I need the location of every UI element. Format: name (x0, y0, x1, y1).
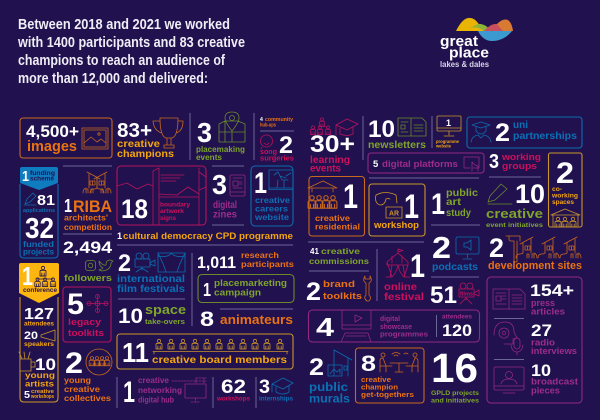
panel: boundary artwork signs: 18 (121, 194, 148, 224)
panel: creative residential: 1 (343, 178, 358, 216)
panel: boundary artwork signs: signs (160, 215, 176, 222)
stat: creative champions (117, 118, 183, 160)
stat: research participants (197, 251, 295, 272)
stat: programme website: 1 (446, 118, 451, 128)
stat: internships (259, 377, 294, 402)
stat: public art study: art (446, 196, 462, 208)
stat: animateurs: 8 (200, 308, 214, 331)
icon: map pin (219, 112, 245, 142)
panel: creative careers website: website (254, 212, 289, 222)
panel: press, radio, broadcast: 10 (531, 361, 551, 380)
panel: placemarketing campaign: placemarketing (214, 278, 287, 288)
stat: brand toolkits: brand (323, 279, 355, 290)
stat: public art study: 1 (431, 188, 445, 221)
icon: wrench (364, 276, 371, 301)
stat: followers (63, 238, 113, 284)
panel: legacy toolkits: legacy (68, 317, 101, 327)
icon: houses (83, 172, 111, 193)
icon: brushes in cup (19, 352, 35, 371)
stat: creative commissions (309, 246, 369, 266)
stat: public art study: study (446, 207, 471, 219)
stat: GPLD projects and initiatives: and initiatives (431, 398, 479, 404)
panel: press, radio, broadcast: articles (531, 306, 565, 316)
stat: song surgeries: surgeries (260, 156, 294, 162)
stat: workshops: 62 (221, 377, 246, 398)
stat: development sites: development sites (488, 260, 582, 272)
stat: public murals: 2 (309, 354, 324, 381)
stat: creative event initiatives: creative (486, 206, 543, 221)
panel: conference: attendees (24, 322, 55, 328)
icon: film camera (459, 283, 479, 304)
icon: people at table with wifi (380, 352, 418, 372)
icon: house mural (328, 350, 352, 376)
panel: press, radio, broadcast: 27 (531, 321, 552, 340)
panel: conference: 10 (35, 355, 56, 374)
panel: creative board members (117, 334, 293, 369)
logo: great place lakes and dales: great (440, 34, 478, 50)
stat: animateurs: animateurs (220, 312, 293, 327)
panel: conference: creative (31, 389, 54, 395)
panel: conference: young (25, 370, 55, 380)
stat: community hub-ups: 4 (260, 117, 263, 123)
panel: creative careers website: careers (255, 204, 288, 214)
panel: creative board members: creative board members (152, 355, 287, 366)
stat: public murals (309, 350, 352, 406)
stat: podcasts: podcasts (432, 262, 478, 273)
stat: programme website: programme (436, 139, 459, 144)
icon: people under roof (308, 181, 337, 208)
banner: 1 funding scheme: scheme (30, 176, 55, 182)
icon: instagram and twitter (86, 260, 113, 271)
panel: creative champion get-togethers: creative (361, 377, 391, 384)
panel: creative residential: creative (315, 213, 350, 223)
panel: creative residential: residential (315, 222, 360, 232)
icon: open newspaper (493, 289, 525, 309)
icon: graduation cap (272, 378, 293, 394)
panel: press, radio, broadcast: broadcast (531, 376, 578, 386)
icon: monitor with presenter (494, 367, 524, 393)
panel: legacy toolkits (63, 287, 111, 342)
stat: working groups (489, 151, 541, 177)
stat: placemaking events (196, 112, 245, 162)
panel: creative champion get-togethers: get-togethers (361, 392, 414, 399)
panel: placemarketing campaign (198, 274, 294, 302)
icon: people in room (551, 209, 580, 227)
stat: RIBA architects' competition: architects' (64, 214, 108, 222)
panel: placemarketing campaign: campaign (214, 288, 261, 298)
stat: brand toolkits: 2 (306, 278, 321, 306)
stat: international film festivals: international (117, 274, 185, 285)
stat: internships: internships (259, 396, 294, 402)
stat: space take-overs: space (145, 302, 186, 317)
icon: tablet zine (230, 175, 245, 196)
stat: young creative collectives (64, 347, 112, 403)
stat: digital zines: zines (213, 208, 237, 220)
stat: animateurs (200, 308, 293, 331)
panel: conference: speakers (24, 341, 54, 348)
logo: great place lakes and dales (440, 18, 513, 69)
panel: digital platforms (368, 153, 484, 173)
stat: space take-overs: 10 (118, 305, 143, 328)
stat: followers: followers (64, 273, 112, 284)
stat: newsletters (368, 116, 427, 151)
stat: international film festivals: film festivals (117, 284, 185, 295)
panel: funding scheme: projects (23, 248, 55, 256)
stat: community hub-ups (260, 117, 293, 128)
stat: workshops: workshops (216, 396, 250, 402)
panel: creative careers website: creative (255, 195, 290, 205)
icon: board table (153, 339, 288, 354)
stat: workshops (216, 377, 250, 402)
title (17, 17, 245, 87)
panel: press, radio, broadcast: press (531, 298, 555, 308)
panel: conference: artists (25, 378, 54, 388)
stat: digital zines: digital (213, 199, 237, 211)
stat: creative champions: creative (117, 138, 160, 150)
icon: circle of people (86, 349, 112, 375)
stat: creative commissions: commissions (309, 256, 369, 266)
icon: monitor speaker (456, 237, 479, 259)
panel: uni partnerships: uni (513, 120, 528, 131)
panel: creative champion get-togethers: 8 (361, 351, 376, 376)
stat: creative event initiatives: 10 (515, 179, 545, 209)
panel: digital showcase programmes: 4 (316, 312, 335, 342)
stat: digital zines (212, 169, 245, 220)
stat: public art study (431, 187, 478, 221)
stat: space take-overs (118, 302, 186, 328)
panel: funding scheme: applications (23, 208, 55, 214)
icon: film camera (135, 253, 155, 272)
stat: public murals: public (309, 380, 348, 394)
panel: conference (19, 261, 59, 402)
panel: digital showcase programmes (308, 310, 480, 342)
title: champions to reach an audience of (18, 53, 225, 69)
stat: international film festivals: 2 (118, 250, 131, 277)
icon: open newsletter (398, 118, 426, 136)
title: more than 12,000 and delivered: (18, 71, 208, 87)
stat: GPLD projects and initiatives: GPLD projects (431, 390, 479, 397)
panel: creative champion get-togethers: champion (361, 384, 398, 392)
panel: legacy toolkits: toolkits (68, 328, 104, 338)
panel: conference: 5 (24, 390, 30, 401)
panel: digital showcase programmes: programmes (380, 330, 428, 338)
stat: working groups: 3 (489, 151, 499, 173)
stat: research participants: 1,011 (197, 253, 236, 272)
stat: learning events: learning (310, 155, 350, 166)
panel: co-working spaces: working (551, 194, 578, 200)
stat: creative champions: 83+ (117, 120, 152, 142)
panel: boundary artwork signs: artwork (160, 208, 184, 215)
icon: AR goggles (376, 192, 402, 218)
stat: online festival: online (384, 282, 417, 293)
panel: conference: workshops (30, 394, 54, 400)
panel: uni partnerships (467, 117, 582, 148)
panel: creative careers website (251, 166, 293, 226)
stat: programme website: website (435, 144, 451, 148)
icon: trophy (153, 118, 183, 148)
stat: learning events: events (310, 164, 341, 174)
stat: GPLD projects and initiatives: 16 (431, 345, 478, 391)
stat: internships: 3 (259, 377, 270, 398)
panel: press, radio, broadcast (487, 277, 582, 403)
panel: creative champion get-togethers (356, 348, 424, 403)
heading: cultural democracy CPD programme: 1 (117, 231, 122, 241)
stat: working groups: working (501, 152, 541, 163)
panel: AR workshop (369, 184, 425, 236)
panel: AR workshop: workshop (373, 220, 419, 231)
icon: crossed tools (87, 294, 108, 312)
stat: creative commissions: creative (321, 246, 360, 256)
stat: programme website (435, 116, 461, 148)
panel: creative residential (308, 176, 364, 236)
banner: 1 funding scheme: funding (30, 171, 55, 177)
stat: community hub-ups: community (265, 117, 293, 123)
logo: great place lakes and dales: place (449, 46, 489, 62)
stat: newsletters: newsletters (368, 140, 427, 151)
stat: young creative collectives: collectives (64, 393, 111, 403)
icon: person at desk (269, 170, 293, 190)
panel: digital showcase programmes: showcase (380, 322, 412, 331)
panel: uni partnerships: partnerships (513, 131, 577, 142)
stat: followers: 2,494 (63, 238, 113, 257)
panel: digital platforms: digital platforms (382, 159, 458, 170)
stat: public art study: public (446, 187, 478, 199)
panel: uni partnerships: 2 (495, 119, 510, 147)
icon: circus tent (386, 249, 410, 277)
banner: 1 conference: conference (23, 288, 58, 294)
panel: digital showcase programmes: digital (380, 314, 400, 323)
stat: RIBA architects' competition: 1 (64, 196, 72, 216)
panel: boundary artwork signs: boundary (160, 202, 190, 208)
panel: funding scheme: 32 (25, 213, 54, 245)
stat: placemaking events: events (196, 153, 223, 162)
stat: learning events (310, 118, 358, 174)
stat: placemaking events: placemaking (196, 145, 245, 154)
panel: digital showcase programmes: attendees (442, 314, 473, 320)
panel: conference: 20 (24, 330, 38, 342)
stat: creative event initiatives: event initiatives (486, 222, 543, 229)
panel: funding scheme (20, 167, 58, 258)
panel: press, radio, broadcast: pieces (531, 386, 560, 396)
panel: co-working spaces (548, 153, 582, 227)
stat: brand toolkits (306, 276, 371, 306)
panel: co-working spaces: spaces (552, 200, 575, 206)
icon: graduate (471, 122, 491, 142)
stat: space take-overs: take-overs (145, 319, 185, 326)
panel: funding scheme: 81 (37, 192, 55, 209)
logo: great place lakes and dales: lakes & dales (440, 60, 490, 69)
icon: hammer and houses (506, 236, 581, 262)
icon: megaphone (41, 330, 55, 341)
stat: creative champions: champions (117, 148, 174, 160)
stat: creative networking digital hub (123, 376, 206, 409)
panel: AR workshop: AR (389, 210, 399, 218)
icon: people and mortarboard (310, 118, 358, 136)
stat: RIBA architects' competition (64, 172, 112, 232)
stat: 51 films: films (460, 292, 473, 298)
panel: digital platforms: 5 (373, 159, 379, 170)
stat: online festival: festival (384, 292, 424, 303)
banner: 1 conference: 1 (22, 261, 33, 291)
panel: creative board members: 11 (122, 337, 149, 368)
panel: images: 4,500+ (26, 122, 79, 141)
stat: 51 films: 51 (430, 282, 457, 309)
stat: creative networking digital hub: creative (138, 376, 170, 385)
stat: creative networking digital hub: 1 (123, 376, 135, 409)
stat: creative networking digital hub: digital hub (138, 396, 174, 404)
stat: creative commissions: 41 (310, 247, 319, 256)
heading: cultural democracy CPD programme: cultural democracy CPD programme (123, 231, 293, 241)
stat: young creative collectives: young (64, 375, 91, 385)
banner: 1 funding scheme (20, 167, 58, 190)
stat: placemaking events: 3 (197, 117, 212, 148)
stat: public murals: murals (309, 392, 350, 406)
stat: song surgeries: song (260, 149, 277, 156)
stat: song surgeries: 2 (279, 132, 293, 159)
stat: international film festivals (117, 250, 185, 295)
stat: development sites: 2 (489, 233, 504, 263)
stat: online festival: 1 (410, 248, 425, 284)
icon: stage curtains (158, 253, 185, 272)
icon: laptop (341, 310, 371, 342)
icon: hand on tablet (464, 157, 479, 171)
icon: pencil (24, 193, 36, 205)
stat: RIBA architects' competition: RIBA (73, 197, 112, 216)
stat: 51 films (430, 282, 479, 309)
icon: pencil (488, 184, 512, 204)
stat: creative event initiatives (486, 179, 545, 229)
stat: young creative collectives: 2 (65, 347, 83, 380)
icon: picture (82, 128, 108, 149)
stat: podcasts: 2 (432, 230, 451, 265)
icon: monitor with network (172, 378, 206, 402)
panel: images: images (27, 138, 77, 155)
stat: podcasts (431, 230, 479, 277)
icon: head with microphone (494, 322, 523, 355)
banner: 1 funding scheme: 1 (22, 168, 29, 185)
panel: press, radio, broadcast: interviews (531, 346, 577, 356)
title: with 1400 participants and 83 creative (17, 35, 245, 51)
stat: creative networking digital hub: networking (138, 386, 182, 395)
title: Between 2018 and 2021 we worked (18, 17, 230, 33)
panel: funding scheme: funded (23, 240, 54, 249)
panel: co-working spaces: 2 (556, 157, 574, 190)
stat: research participants: research (241, 251, 279, 260)
panel: placemarketing campaign: 1 (203, 280, 211, 300)
panel: images (20, 118, 112, 158)
panel: boundary artwork signs (117, 166, 206, 225)
panel: digital showcase programmes: 120 (442, 321, 472, 340)
stat: working groups: groups (502, 161, 537, 172)
stat: brand toolkits: toolkits (323, 291, 362, 302)
stat: digital zines: 3 (212, 169, 227, 200)
stat: song surgeries (260, 132, 294, 162)
panel: co-working spaces: co- (552, 187, 562, 193)
stat: community hub-ups: hub-ups (260, 122, 276, 128)
panel: press, radio, broadcast: 154+ (530, 281, 574, 300)
panel: legacy toolkits: 5 (67, 288, 84, 321)
stat: RIBA architects' competition: competition (64, 223, 112, 232)
stat: newsletters: 10 (368, 116, 395, 143)
stat: young creative collectives: creative (64, 384, 100, 394)
stat: development sites (488, 233, 582, 272)
stat: research participants: participants (241, 260, 295, 269)
panel: press, radio, broadcast: radio (531, 338, 556, 348)
stat: learning events: 30+ (310, 131, 355, 158)
panel: conference: 127 (24, 306, 54, 323)
banner: 1 conference (19, 261, 59, 303)
panel: creative careers website: 1 (254, 167, 267, 200)
stat: online festival (384, 248, 425, 303)
panel: AR workshop: 1 (404, 188, 419, 226)
